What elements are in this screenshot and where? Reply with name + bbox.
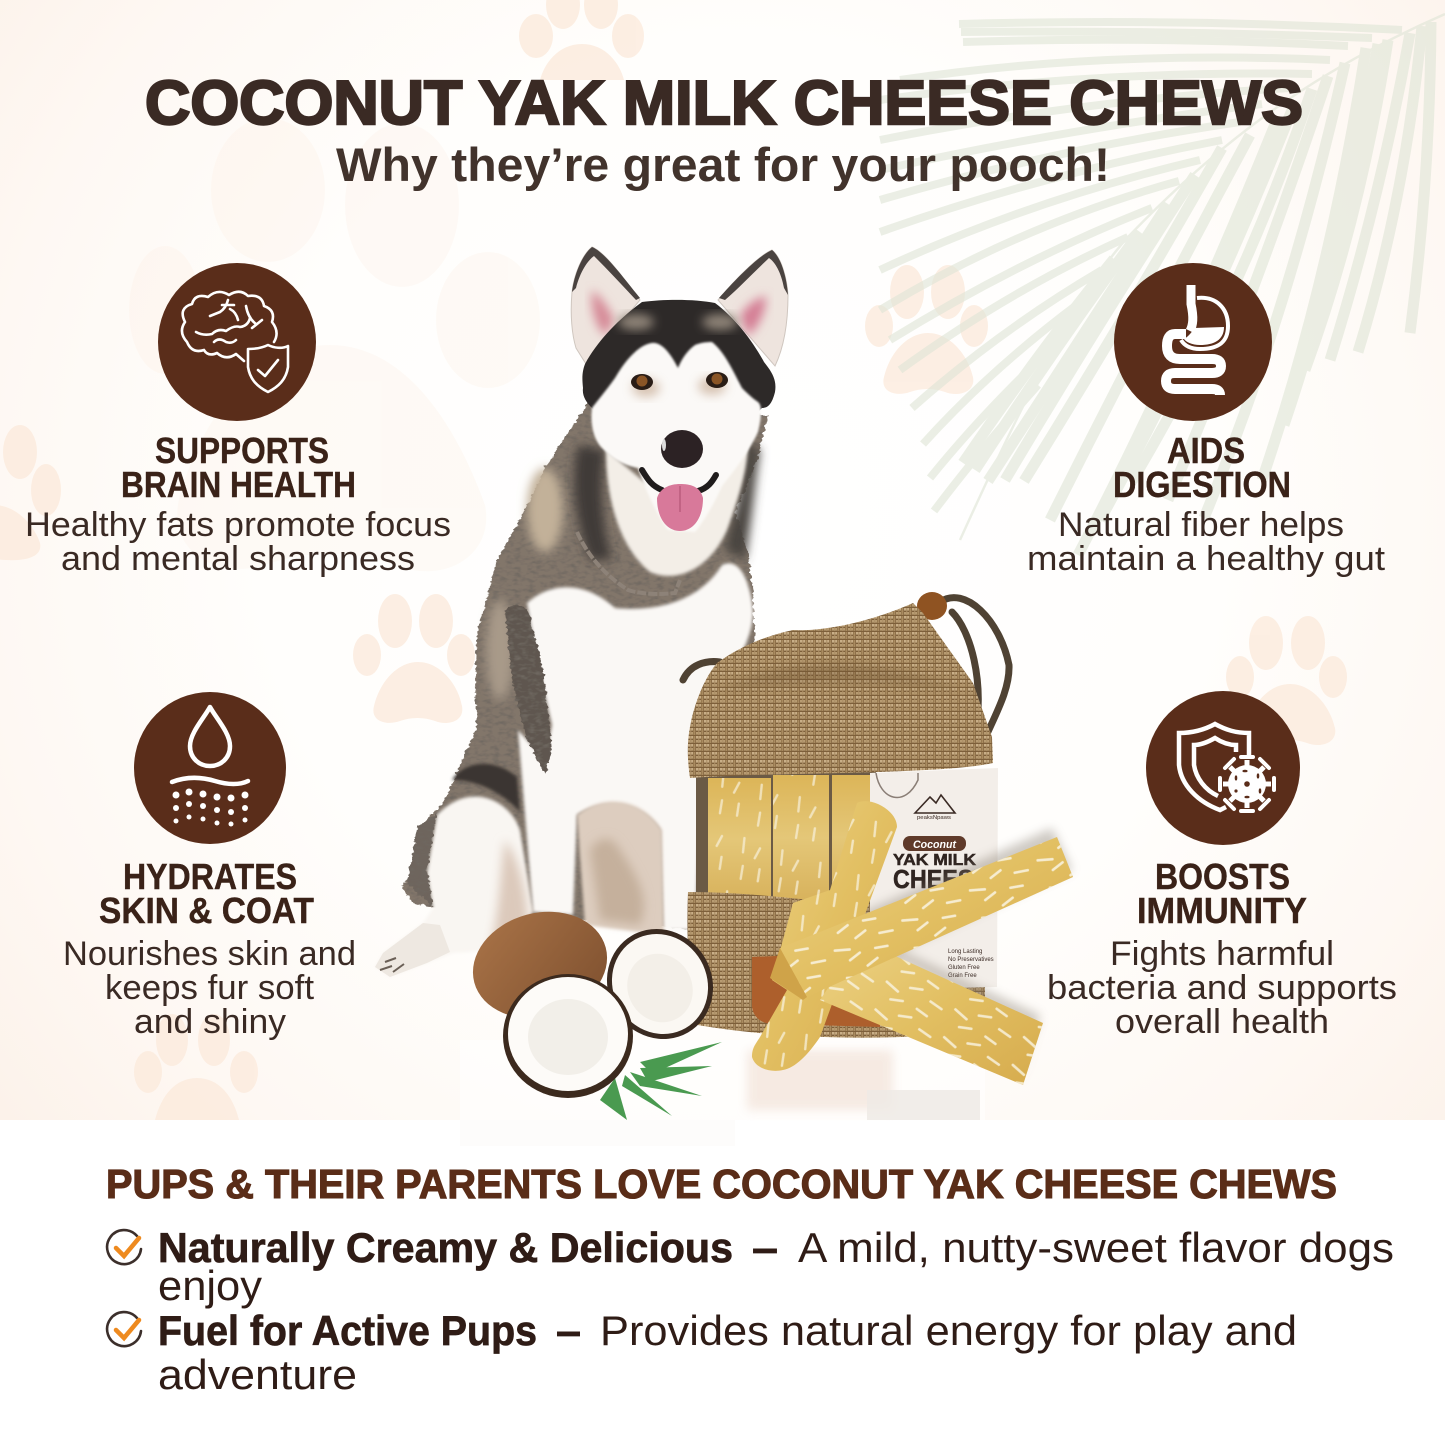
nose [661, 430, 703, 468]
bottom section heading: PUPS & THEIR PARENTS LOVE COCONUT YAK CHEESE CHEWS [106, 1161, 1337, 1207]
benefit text: Naturally Creamy & Delicious [158, 1224, 733, 1271]
paw: large faint left [129, 118, 540, 571]
palm: upper fronds [880, 22, 1402, 511]
subtitle: Why they’re great for your pooch! [336, 138, 1110, 191]
icon: check [107, 1312, 141, 1346]
product label card: Gluten Free [948, 965, 980, 971]
product label card: peaksNpaws [917, 815, 952, 821]
feature: brain health [25, 263, 451, 578]
benefit text: A mild, nutty-sweet flavor dogs [798, 1224, 1394, 1271]
tan fur on left ruff [527, 468, 563, 552]
belly fur [577, 801, 664, 935]
palm: lower fronds [963, 22, 1431, 555]
heading: HYDRATES [123, 856, 297, 897]
heading: AIDS [1167, 430, 1245, 471]
chew upper right [770, 837, 1073, 1000]
heading [1137, 856, 1307, 931]
title: COCONUT YAK MILK CHEESE CHEWS [145, 69, 1303, 138]
product label card [870, 768, 998, 990]
mouth and tongue [642, 470, 716, 531]
description [25, 506, 451, 578]
heading: BRAIN HEALTH [121, 464, 356, 505]
palm: main rib [960, 14, 1445, 540]
icon: brain with shield [158, 263, 316, 421]
dog body fur [400, 400, 768, 930]
dark neck shading [574, 445, 612, 560]
description: Natural fiber helps [1058, 506, 1344, 544]
product: burlap bag [683, 592, 1009, 1038]
head grey highlights [618, 314, 738, 330]
icon: water drop and skin [134, 692, 286, 844]
paw: upper right [865, 265, 988, 394]
dark saddle on haunch [452, 764, 520, 812]
heading: DIGESTION [1113, 464, 1291, 505]
white face [591, 342, 761, 532]
collar chain [577, 532, 680, 594]
feature: digestion [1027, 263, 1386, 578]
heading [1113, 430, 1291, 505]
product label card: No Preservatives [948, 957, 994, 963]
leather patch [752, 955, 880, 1027]
paw: bottom left [134, 1014, 258, 1120]
heading [121, 430, 356, 505]
left ear [571, 247, 640, 364]
description: bacteria and supports [1047, 969, 1397, 1007]
half coconut front [503, 974, 633, 1098]
grey shoulder strip [505, 605, 552, 775]
grey rear strip [407, 813, 437, 907]
description [1047, 935, 1397, 1041]
product label card: CHEESE [893, 864, 989, 894]
paw prints background [0, 0, 1347, 1120]
chews in window [708, 775, 874, 901]
heading: BOOSTS [1155, 856, 1290, 897]
half coconut right [587, 910, 733, 1058]
description [1027, 506, 1386, 578]
benefit: fuel for active pups [107, 1307, 1297, 1398]
eyes [631, 372, 728, 390]
product label card: YAK MILK [893, 852, 976, 869]
product label card: Coconut [913, 839, 957, 851]
head dark mask [582, 300, 775, 425]
description: Nourishes skin and [63, 935, 356, 973]
front paw [375, 923, 450, 977]
chew lower right [820, 940, 1043, 1085]
bag fold shading [720, 664, 960, 690]
description: keeps fur soft [105, 969, 315, 1007]
feature: immunity [1047, 691, 1397, 1041]
icon: stomach and intestine [1114, 263, 1272, 421]
product: loose yak cheese chews [752, 801, 1073, 1090]
bag window back [696, 770, 876, 905]
chew shadow [790, 828, 1072, 1090]
description: maintain a healthy gut [1027, 540, 1386, 578]
description: and mental sharpness [61, 540, 415, 578]
right ear [718, 250, 788, 366]
benefit text [158, 1224, 1394, 1309]
heading: SKIN & COAT [99, 890, 314, 931]
icon: shield and virus [1146, 691, 1300, 845]
benefit text [158, 1307, 1297, 1398]
description: and shiny [134, 1003, 286, 1041]
whole coconut [461, 897, 619, 1033]
icon: check [107, 1230, 141, 1264]
benefit text: – [752, 1224, 778, 1271]
benefit: naturally creamy [107, 1224, 1394, 1309]
paw: top centre [519, 0, 644, 80]
product label card: Grain Free [948, 973, 977, 979]
description [63, 935, 356, 1041]
chew vertical [752, 801, 897, 1071]
paw: middle left [353, 594, 475, 723]
heading: IMMUNITY [1137, 890, 1307, 931]
eye brown shading [632, 377, 726, 397]
heading [99, 856, 314, 931]
benefit text: – [556, 1307, 581, 1354]
palm leaves [600, 1042, 722, 1120]
benefit text: adventure [158, 1351, 357, 1398]
bag upper burlap [688, 603, 993, 778]
feature: hydrates [63, 692, 356, 1041]
white chest and legs [518, 563, 753, 930]
benefit text: Provides natural energy for play and [600, 1307, 1297, 1354]
white haunch [375, 796, 533, 977]
paw: left edge [0, 425, 61, 560]
dog photo illustration [375, 247, 788, 977]
paw: lower right [1226, 616, 1347, 745]
product label card: Long Lasting [948, 949, 982, 955]
bag lower burlap [687, 892, 985, 1038]
floor and product reflection [460, 1040, 985, 1146]
benefit text: enjoy [158, 1262, 262, 1309]
white throat bib [606, 440, 748, 576]
bag cord [683, 598, 1009, 745]
description: Healthy fats promote focus [25, 506, 451, 544]
palm leaf decoration [880, 14, 1445, 555]
coconuts and leaves [461, 897, 733, 1120]
description: overall health [1115, 1003, 1329, 1041]
heading: SUPPORTS [155, 430, 329, 471]
bead [917, 592, 947, 620]
description: Fights harmful [1110, 935, 1334, 973]
benefit text: Fuel for Active Pups [158, 1307, 537, 1354]
